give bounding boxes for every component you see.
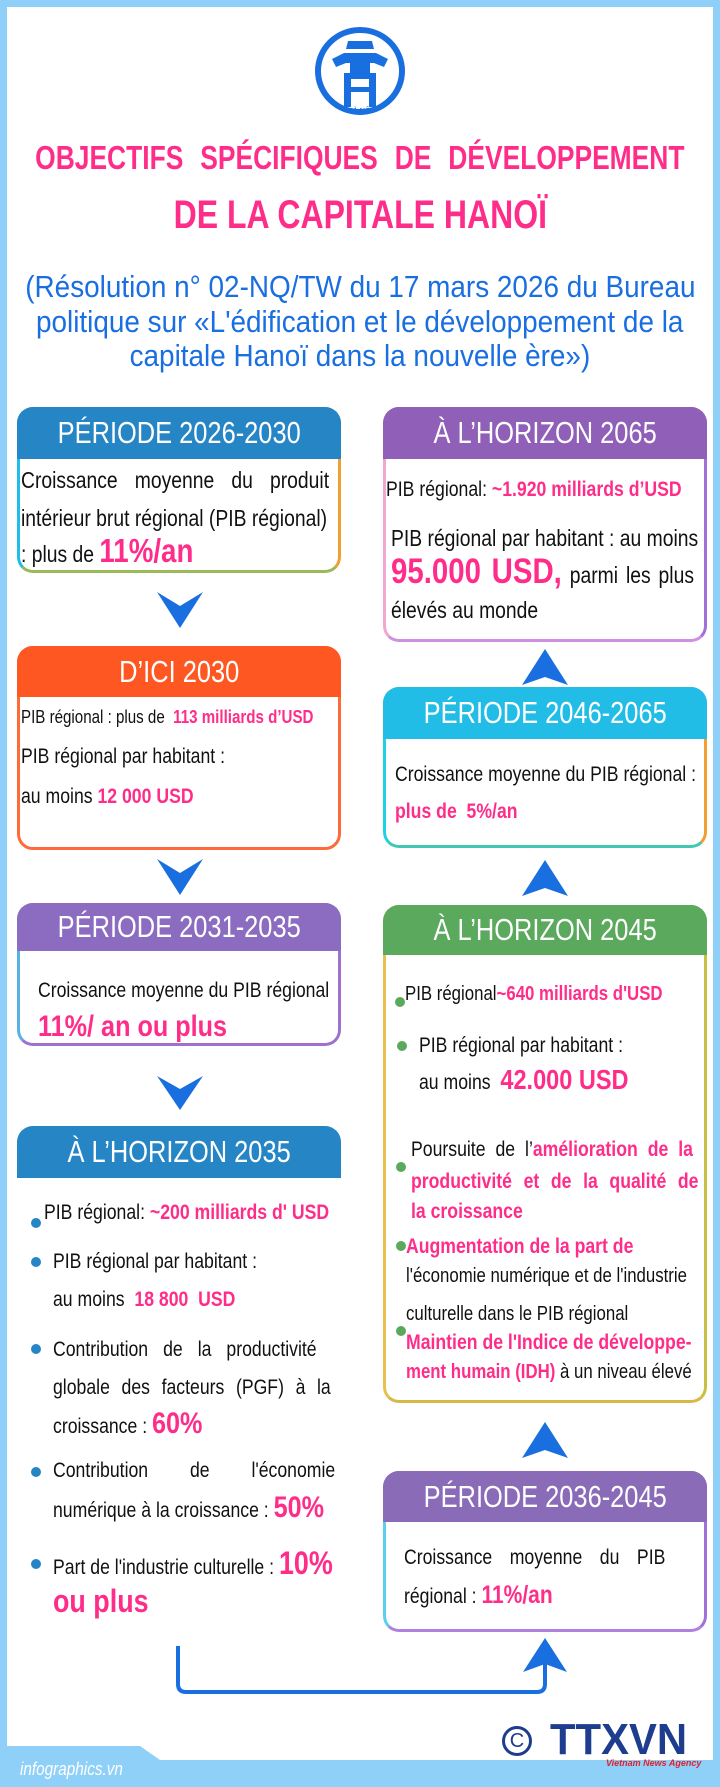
panel: à l'horizon 2045: au moins 42.000 USD: [419, 1064, 629, 1095]
panel: période 2046-2065: [383, 687, 707, 848]
panel: à l'horizon 2045: ment humain (IDH) à un niveau élevé: [406, 1361, 692, 1383]
panel: période 2036-2045: régional : 11%/an: [404, 1581, 553, 1609]
logo: copyright TTXVN: TTXVN: [550, 1715, 687, 1764]
subtitle: politique sur «L'édification et le développement de la: [36, 304, 684, 338]
arrow up 1: [522, 649, 568, 685]
panel: à l'horizon 2065: 95.000 USD, parmi les plus: [391, 552, 694, 591]
subtitle: [25, 269, 695, 373]
panel: à l'horizon 2035: PIB régional: ~200 milliards d' USD: [44, 1201, 329, 1224]
panel: à l'horizon 2035: globale des facteurs (PGF) à la: [53, 1376, 331, 1399]
logo: Hanoi emblem: HÀ NỘI: [348, 106, 372, 115]
panel: à l'horizon 2065: [383, 407, 707, 642]
footer: infographics.vn: infographics.vn: [20, 1759, 123, 1779]
arrow down 1: [157, 592, 203, 628]
panel: période 2046-2065: plus de 5%/an: [395, 800, 518, 823]
panel: période 2026-2030: [17, 407, 341, 573]
panel: à l'horizon 2035: numérique à la croissance : 50%: [53, 1491, 324, 1524]
panel: à l'horizon 2035: Contribution de la productivité: [53, 1338, 317, 1361]
panel: à l'horizon 2045: Maintien de l'Indice de développe-: [406, 1331, 692, 1354]
logo: copyright TTXVN: Vietnam News Agency: [606, 1758, 701, 1768]
panel: à l'horizon 2045: l'économie numérique et de l'industrie: [406, 1265, 687, 1287]
panel: d'ici 2030: D’ICI 2030: [119, 654, 239, 689]
panel: période 2036-2045: [383, 1471, 707, 1632]
logo: copyright TTXVN: [502, 1715, 702, 1768]
panel: à l'horizon 2045: la croissance: [411, 1200, 523, 1223]
panel: période 2026-2030: Croissance moyenne du produit: [21, 467, 329, 493]
panel: à l'horizon 2045: [383, 905, 707, 1403]
panel: à l'horizon 2045: À L’HORIZON 2045: [433, 912, 657, 947]
panel: période 2046-2065: Croissance moyenne du PIB régional :: [395, 763, 696, 786]
connector arrow bottom: [176, 1638, 567, 1694]
panel: à l'horizon 2035: PIB régional par habitant :: [53, 1250, 257, 1273]
panel: à l'horizon 2065: élevés au monde: [391, 597, 538, 623]
panel: à l'horizon 2035: croissance : 60%: [53, 1407, 202, 1440]
panel: à l'horizon 2035: au moins 18 800 USD: [53, 1288, 235, 1311]
arrow up 3: [522, 1422, 568, 1458]
panel: période 2046-2065: PÉRIODE 2046-2065: [423, 695, 667, 730]
subtitle: capitale Hanoï dans la nouvelle ère»): [130, 338, 590, 373]
panel: d'ici 2030: au moins 12 000 USD: [21, 785, 194, 808]
footer: infographics.vn: [7, 1746, 713, 1779]
panel: à l'horizon 2065: PIB régional par habitant : au moins: [391, 525, 698, 551]
subtitle: (Résolution n° 02-NQ/TW du 17 mars 2026 du Bureau: [25, 269, 695, 304]
arrow up 2: [522, 860, 568, 896]
panel: à l'horizon 2035: [17, 1126, 341, 1619]
logo: Hanoi emblem: [315, 27, 405, 115]
panel: d'ici 2030: [17, 646, 341, 850]
panel: période 2026-2030: : plus de 11%/an: [21, 532, 193, 569]
panel: à l'horizon 2045: Augmentation de la part de: [406, 1235, 633, 1258]
panel: période 2031-2035: PÉRIODE 2031-2035: [57, 909, 301, 944]
panel: période 2026-2030: intérieur brut régional (PIB régional): [21, 505, 327, 531]
title: OBJECTIFS SPÉCIFIQUES DE DÉVELOPPEMENT: [35, 139, 685, 176]
panel: période 2026-2030: PÉRIODE 2026-2030: [57, 415, 301, 450]
panel: période 2031-2035: 11%/ an ou plus: [38, 1010, 227, 1043]
panel: période 2031-2035: Croissance moyenne du PIB régional: [38, 979, 329, 1002]
panel: période 2031-2035: [17, 903, 341, 1046]
panel: période 2036-2045: Croissance moyenne du PIB: [404, 1546, 665, 1569]
arrow down 3: [157, 1076, 203, 1110]
arrow down 2: [157, 859, 203, 895]
panel: d'ici 2030: PIB régional : plus de 113 milliards d’USD: [21, 707, 313, 727]
panel: d'ici 2030: PIB régional par habitant :: [21, 745, 225, 768]
panel: à l'horizon 2045: productivité et de la qualité de: [411, 1170, 698, 1193]
panel: à l'horizon 2035: Part de l'industrie culturelle : 10%: [53, 1545, 333, 1581]
panel: à l'horizon 2035: ou plus: [53, 1583, 149, 1619]
panel: à l'horizon 2065: À L’HORIZON 2065: [433, 415, 657, 450]
panel: à l'horizon 2035: À L’HORIZON 2035: [67, 1134, 291, 1169]
panel: à l'horizon 2035: Contribution de l'économie: [53, 1459, 335, 1482]
title: [35, 139, 685, 237]
title: DE LA CAPITALE HANOÏ: [173, 193, 547, 237]
panel: à l'horizon 2045: culturelle dans le PIB régional: [406, 1303, 628, 1325]
panel: à l'horizon 2045: PIB régional par habitant :: [419, 1034, 623, 1057]
panel: à l'horizon 2045: Poursuite de l’amélioration de la: [411, 1138, 693, 1161]
panel: à l'horizon 2045: PIB régional~640 milliards d'USD: [405, 983, 663, 1005]
logo: copyright TTXVN: C: [510, 1730, 524, 1752]
panel: période 2036-2045: PÉRIODE 2036-2045: [423, 1479, 667, 1514]
panel: à l'horizon 2065: PIB régional: ~1.920 milliards d’USD: [386, 478, 682, 501]
